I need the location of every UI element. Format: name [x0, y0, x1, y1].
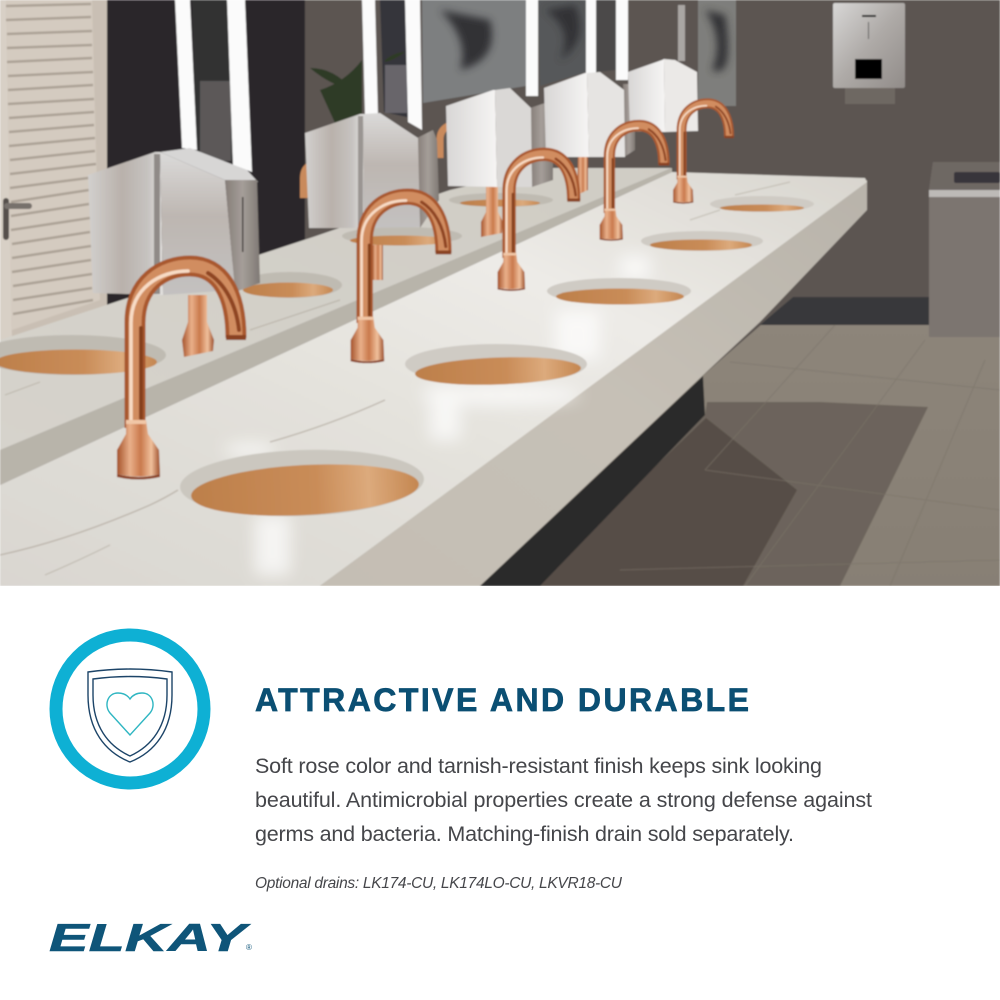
faucet 3	[498, 154, 580, 291]
sink 2	[405, 344, 587, 387]
reflected counter surface in mirror	[0, 168, 672, 485]
sink 1	[179, 446, 425, 521]
paper towel dispenser on wall	[833, 3, 905, 104]
heading: ATTRACTIVE AND DURABLE	[255, 682, 749, 718]
icon: door handle	[3, 198, 32, 240]
sink 4	[641, 231, 763, 251]
dispenser 4	[544, 72, 635, 157]
floor tiles and shadow	[480, 297, 1000, 586]
marble veins and highlights	[0, 182, 790, 575]
plant	[310, 52, 405, 123]
optional drains note: Optional drains: LK174-CU, LK174LO-CU, LKVR18-CU	[255, 875, 623, 892]
mirrors and LED strips	[107, 0, 736, 320]
panel: white text area	[49, 628, 872, 960]
door with louvres	[0, 0, 114, 342]
panel: photo of washroom counter with rose-copper sinks	[0, 0, 1000, 586]
dispenser 1	[88, 148, 260, 295]
logo: Elkay: ELKAY	[49, 917, 251, 960]
reflected sinks	[0, 193, 553, 375]
faucet 2	[351, 197, 451, 363]
icon: shield with heart in blue ring	[56, 635, 204, 783]
body text: beautiful. Antimicrobial properties create a strong defense against	[255, 788, 872, 812]
dispenser 5	[628, 59, 698, 132]
logo: Elkay: ®	[246, 943, 252, 952]
sink 3	[547, 278, 691, 304]
waste bin cabinet	[929, 162, 1000, 337]
dispenser 3	[446, 88, 553, 187]
body text: germs and bacteria. Matching-finish drain sold separately.	[255, 822, 794, 846]
faucet 1	[117, 266, 246, 480]
counter front side face	[320, 180, 867, 586]
reflected faucets	[182, 126, 588, 357]
body text	[255, 754, 872, 846]
body text: Soft rose color and tarnish-resistant finish keeps sink looking	[255, 754, 822, 778]
logo: Elkay	[49, 917, 252, 960]
faucet 5	[673, 103, 734, 204]
faucet 4	[600, 126, 669, 241]
sink 5	[710, 196, 814, 212]
counter top surface	[0, 172, 867, 586]
dispenser 2	[305, 113, 439, 228]
wall and floor base	[0, 0, 1000, 586]
